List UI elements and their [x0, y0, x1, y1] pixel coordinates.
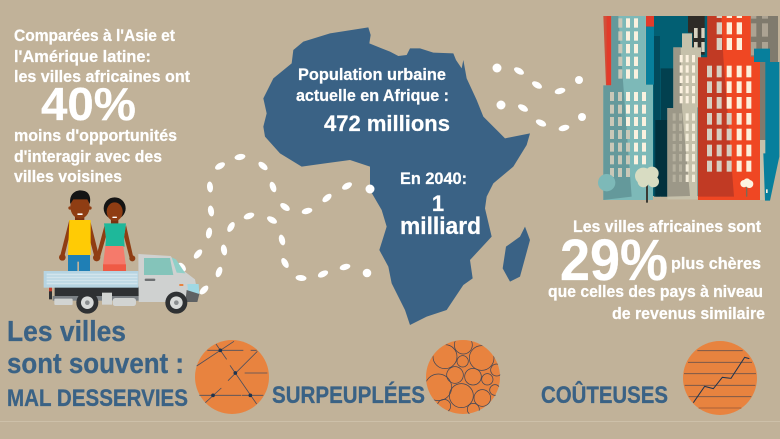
- text: 2040 population: En 2040:: [400, 169, 467, 188]
- text: cost comparison: Les villes africaines sont: [573, 218, 761, 236]
- text: opportunities comparison: Comparées à l'Asie et: [14, 27, 175, 45]
- label: coûteuses: COÛTEUSES: [541, 381, 668, 409]
- building: dark top tower: [688, 16, 705, 55]
- text: cost comparison: plus chères: [671, 255, 761, 273]
- text: urban population: Population urbaine: [298, 65, 446, 84]
- icon: road network circle: [195, 340, 269, 414]
- building: beige tower: [667, 33, 701, 199]
- text: opportunities comparison: villes voisines: [14, 168, 122, 186]
- building: teal tower: [598, 16, 653, 200]
- heading: les villes sont souvent: sont souvent :: [7, 348, 184, 380]
- text: opportunities comparison: [14, 27, 190, 186]
- footprints: upper trail: [492, 64, 586, 132]
- text: cost comparison: que celles des pays à niveau: [548, 283, 763, 301]
- text: opportunities comparison: les villes africaines ont: [14, 68, 190, 86]
- icon: packed circles: [426, 340, 500, 414]
- person: woman: [97, 197, 135, 272]
- footprints: lower trail: [176, 153, 374, 296]
- illustration: city skyline: [598, 16, 779, 203]
- map: Africa: [263, 27, 530, 325]
- text: opportunities comparison: moins d'opportunités: [14, 127, 177, 145]
- text: urban population: actuelle en Afrique :: [296, 86, 449, 105]
- building: grey tower: [751, 16, 778, 200]
- person: man: [59, 190, 100, 272]
- text: opportunities comparison: l'Amérique latine:: [14, 48, 151, 66]
- illustration: couple on truck: [44, 190, 199, 314]
- icon: pale tree: [635, 167, 659, 203]
- text: opportunities comparison: 40%: [41, 78, 136, 130]
- text: opportunities comparison: d'interagir avec des: [14, 148, 162, 166]
- building: red tower: [698, 16, 760, 200]
- text: cost comparison: 29%: [560, 228, 668, 293]
- text: 2040 population: [400, 169, 481, 240]
- building: blue right tower: [754, 49, 779, 201]
- text: 2040 population: 1: [432, 191, 444, 216]
- icon: rising cost chart: [683, 341, 757, 415]
- heading: les villes sont souvent: [7, 316, 184, 380]
- text: cost comparison: [548, 218, 765, 323]
- text: urban population: [296, 65, 450, 136]
- label: surpeuplées: SURPEUPLÉES: [272, 381, 425, 409]
- text: urban population: 472 millions: [324, 111, 450, 136]
- heading: les villes sont souvent: Les villes: [7, 316, 126, 348]
- text: cost comparison: de revenus similaire: [612, 305, 765, 323]
- text: 2040 population: milliard: [400, 213, 481, 240]
- truck: [44, 254, 199, 314]
- label: mal desservies: MAL DESSERVIES: [7, 385, 188, 412]
- icon: small tree: [740, 178, 753, 197]
